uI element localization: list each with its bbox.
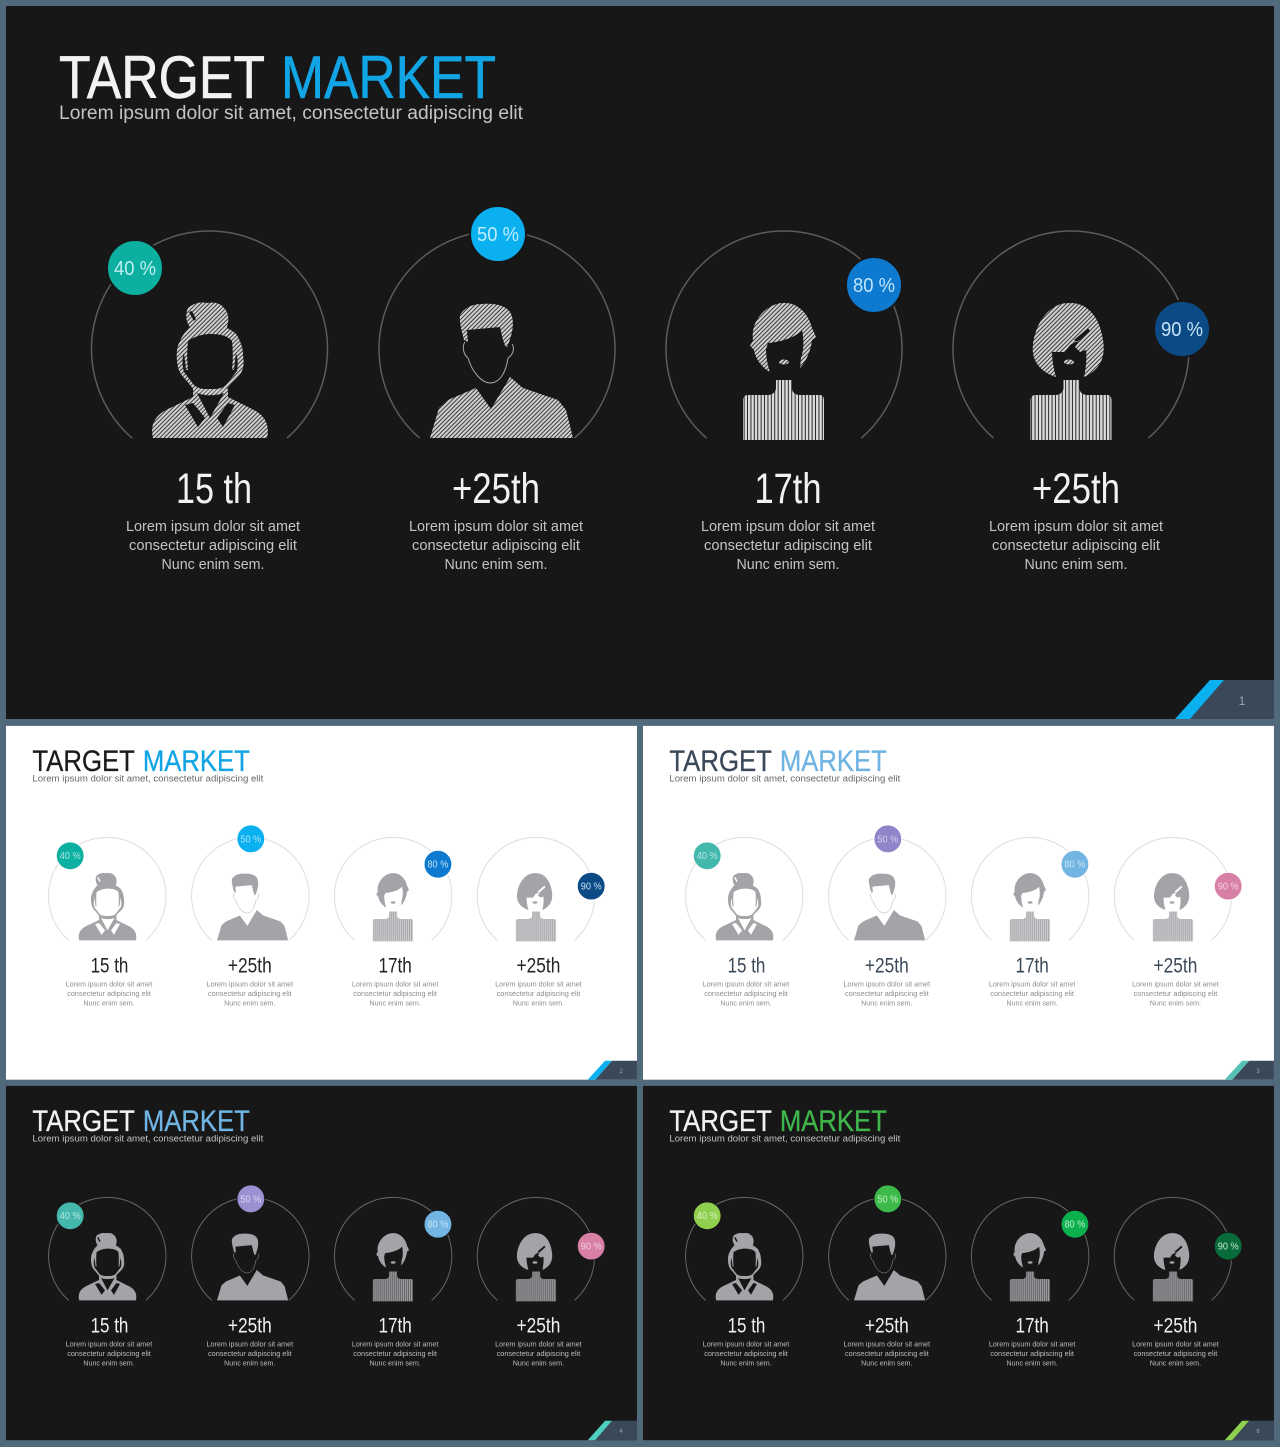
subtitle: Lorem ipsum dolor sit amet, consectetur adipiscing elit	[32, 774, 264, 785]
group: 17th: Lorem ipsum dolor sit amet	[989, 1340, 1076, 1349]
footer tab	[1225, 1421, 1274, 1440]
group: +25th second: 90 %	[1218, 1242, 1239, 1253]
slide background	[643, 726, 1274, 1080]
group: 15 th: Nunc enim sem.	[83, 999, 135, 1008]
group: +25th	[829, 1185, 946, 1368]
group: +25th: consectetur adipiscing elit	[412, 537, 581, 554]
group: +25th second: consectetur adipiscing elit	[1134, 1349, 1218, 1358]
group: 17th: 80 %	[427, 860, 449, 871]
group: 15 th	[686, 1197, 803, 1368]
group: 17th: consectetur adipiscing elit	[353, 989, 438, 998]
group: 15 th: consectetur adipiscing elit	[67, 1349, 152, 1358]
group: +25th: consectetur adipiscing elit	[845, 989, 930, 998]
group: 15 th: 15 th	[91, 1314, 128, 1338]
group: 15 th: consectetur adipiscing elit	[129, 537, 298, 554]
subtitle: Lorem ipsum dolor sit amet, consectetur adipiscing elit	[669, 1134, 901, 1145]
group: +25th: consectetur adipiscing elit	[208, 989, 293, 998]
group: 17th: 17th	[754, 465, 822, 513]
group: 17th: consectetur adipiscing elit	[353, 1349, 438, 1358]
group: +25th second: consectetur adipiscing elit	[1134, 989, 1218, 998]
panel: slide 1 dark large	[6, 6, 1274, 719]
group: +25th: +25th	[228, 1314, 272, 1338]
group: +25th second: 90 %	[581, 1242, 602, 1253]
group: +25th: consectetur adipiscing elit	[208, 1349, 293, 1358]
footer tab	[588, 1421, 637, 1440]
group: 15 th: consectetur adipiscing elit	[704, 1349, 789, 1358]
panel: slide 4 dark pastel	[6, 1086, 637, 1440]
group: +25th second: Nunc enim sem.	[513, 1359, 564, 1368]
group: +25th second: 90 %	[1161, 319, 1203, 341]
title: TARGET	[669, 1105, 772, 1138]
group: +25th	[192, 825, 309, 1008]
group: +25th: Lorem ipsum dolor sit amet	[409, 518, 584, 535]
group: 15 th: Nunc enim sem.	[720, 1359, 772, 1368]
group: 15 th: 15 th	[728, 1314, 765, 1338]
group: +25th second: Lorem ipsum dolor sit amet	[989, 518, 1164, 535]
group: +25th: Nunc enim sem.	[224, 999, 275, 1008]
title accent: MARKET	[281, 44, 496, 111]
group: 15 th: 40 %	[60, 1211, 81, 1222]
group: +25th second: +25th	[1154, 954, 1197, 978]
group: 17th: 17th	[1015, 1314, 1049, 1338]
group: 17th: consectetur adipiscing elit	[704, 537, 873, 554]
group: 17th: Nunc enim sem.	[736, 556, 840, 573]
group: 17th	[971, 1197, 1089, 1368]
group: +25th second: Nunc enim sem.	[1150, 1359, 1201, 1368]
group: 15 th: Lorem ipsum dolor sit amet	[126, 518, 301, 535]
group: 17th: Nunc enim sem.	[1006, 999, 1058, 1008]
group: +25th second: Nunc enim sem.	[1150, 999, 1201, 1008]
group: +25th: Nunc enim sem.	[224, 1359, 275, 1368]
group: 17th: 17th	[378, 1314, 412, 1338]
group: 17th: Lorem ipsum dolor sit amet	[352, 1340, 439, 1349]
group: +25th second: consectetur adipiscing elit	[992, 537, 1161, 554]
group: +25th second: Lorem ipsum dolor sit amet	[1132, 980, 1220, 989]
group: 15 th: Lorem ipsum dolor sit amet	[703, 980, 790, 989]
group: +25th: +25th	[865, 954, 909, 978]
group: +25th: 50 %	[240, 834, 261, 845]
group: +25th second	[477, 1197, 605, 1368]
group: 17th: 80 %	[1064, 1220, 1086, 1231]
slide background	[6, 1086, 637, 1440]
group: 15 th: 15 th	[176, 465, 252, 513]
group: 15 th: 15 th	[91, 954, 128, 978]
group: +25th second: 90 %	[1218, 882, 1239, 893]
group: 15 th: Nunc enim sem.	[162, 556, 264, 573]
group: 17th: Nunc enim sem.	[369, 1359, 421, 1368]
group: +25th second: Nunc enim sem.	[513, 999, 564, 1008]
group: 15 th: Nunc enim sem.	[83, 1359, 135, 1368]
title accent: MARKET	[143, 1105, 250, 1138]
group: +25th second: Lorem ipsum dolor sit amet	[495, 980, 583, 989]
footer tab: 3	[1256, 1069, 1260, 1075]
group: 17th	[334, 837, 452, 1008]
group: +25th: Lorem ipsum dolor sit amet	[207, 980, 294, 989]
group: 17th: Lorem ipsum dolor sit amet	[352, 980, 439, 989]
group: +25th: 50 %	[877, 834, 898, 845]
group: 17th: consectetur adipiscing elit	[990, 989, 1075, 998]
group: +25th: Nunc enim sem.	[861, 999, 912, 1008]
group: +25th second: Lorem ipsum dolor sit amet	[495, 1340, 583, 1349]
group: 17th: Lorem ipsum dolor sit amet	[989, 980, 1076, 989]
group: +25th: 50 %	[477, 224, 519, 246]
group: +25th second: +25th	[1032, 465, 1120, 513]
group: 17th: Nunc enim sem.	[1006, 1359, 1058, 1368]
group: 15 th: 15 th	[728, 954, 765, 978]
group: 15 th	[686, 837, 803, 1008]
title: TARGET	[59, 44, 265, 111]
group: 17th: 80 %	[427, 1220, 449, 1231]
group: 15 th: consectetur adipiscing elit	[67, 989, 152, 998]
group: +25th: Nunc enim sem.	[444, 556, 548, 573]
subtitle: Lorem ipsum dolor sit amet, consectetur adipiscing elit	[59, 103, 524, 124]
panel: slide 2 white	[6, 726, 637, 1080]
title: TARGET	[32, 1105, 135, 1138]
group: +25th second	[1114, 1197, 1242, 1368]
footer tab: 4	[619, 1429, 623, 1435]
title accent: MARKET	[143, 745, 250, 778]
title: TARGET	[32, 745, 135, 778]
group: 17th: consectetur adipiscing elit	[990, 1349, 1075, 1358]
group: 15 th: Lorem ipsum dolor sit amet	[66, 980, 153, 989]
group: 17th	[666, 231, 902, 573]
group: +25th second: +25th	[517, 1314, 560, 1338]
group: 15 th	[49, 1197, 166, 1368]
group: +25th	[192, 1185, 309, 1368]
group: +25th: +25th	[865, 1314, 909, 1338]
group: +25th: Lorem ipsum dolor sit amet	[844, 1340, 931, 1349]
group: 15 th: 40 %	[60, 851, 81, 862]
group: 17th: Nunc enim sem.	[369, 999, 421, 1008]
group: 17th: 17th	[378, 954, 412, 978]
group: +25th second: Nunc enim sem.	[1024, 556, 1128, 573]
group: 15 th: 40 %	[114, 258, 156, 280]
group: +25th second	[477, 837, 605, 1008]
footer tab	[1225, 1061, 1274, 1080]
slide background	[6, 6, 1274, 719]
group: +25th: Lorem ipsum dolor sit amet	[207, 1340, 294, 1349]
title accent: MARKET	[780, 1105, 887, 1138]
group: +25th: consectetur adipiscing elit	[845, 1349, 930, 1358]
group: 15 th: 40 %	[697, 851, 718, 862]
footer tab	[588, 1061, 637, 1080]
group: +25th	[379, 206, 615, 573]
group: 15 th	[49, 837, 166, 1008]
group: +25th second: Lorem ipsum dolor sit amet	[1132, 1340, 1220, 1349]
group: +25th second: +25th	[517, 954, 560, 978]
group: 15 th: consectetur adipiscing elit	[704, 989, 789, 998]
title accent: MARKET	[780, 745, 887, 778]
subtitle: Lorem ipsum dolor sit amet, consectetur adipiscing elit	[669, 774, 901, 785]
group: +25th: Nunc enim sem.	[861, 1359, 912, 1368]
group: +25th: +25th	[228, 954, 272, 978]
group: +25th: 50 %	[240, 1194, 261, 1205]
panel: slide 5 dark green	[643, 1086, 1274, 1440]
group: +25th second: +25th	[1154, 1314, 1197, 1338]
group: +25th second: consectetur adipiscing elit	[497, 1349, 581, 1358]
group: 17th: 17th	[1015, 954, 1049, 978]
group: 17th: 80 %	[853, 275, 895, 297]
panel: slide 3 white pastel	[643, 726, 1274, 1080]
group: +25th	[829, 825, 946, 1008]
group: +25th second	[953, 231, 1210, 573]
title: TARGET	[669, 745, 772, 778]
group: 15 th: Lorem ipsum dolor sit amet	[66, 1340, 153, 1349]
group: 17th: 80 %	[1064, 860, 1086, 871]
slide background	[643, 1086, 1274, 1440]
group: 17th: Lorem ipsum dolor sit amet	[701, 518, 876, 535]
group: +25th second: 90 %	[581, 882, 602, 893]
footer tab: 6	[1256, 1429, 1260, 1435]
group: +25th: +25th	[452, 465, 540, 513]
group: 15 th: Nunc enim sem.	[720, 999, 772, 1008]
subtitle: Lorem ipsum dolor sit amet, consectetur adipiscing elit	[32, 1134, 264, 1145]
footer tab: 1	[1239, 694, 1246, 708]
group: +25th second: consectetur adipiscing elit	[497, 989, 581, 998]
slide background	[6, 726, 637, 1080]
group: 17th	[334, 1197, 452, 1368]
footer tab	[1175, 680, 1274, 719]
group: +25th second	[1114, 837, 1242, 1008]
group: +25th: Lorem ipsum dolor sit amet	[844, 980, 931, 989]
group: +25th: 50 %	[877, 1194, 898, 1205]
group: 15 th	[91, 231, 328, 573]
group: 17th	[971, 837, 1089, 1008]
group: 15 th: Lorem ipsum dolor sit amet	[703, 1340, 790, 1349]
footer tab: 2	[619, 1069, 623, 1075]
group: 15 th: 40 %	[697, 1211, 718, 1222]
